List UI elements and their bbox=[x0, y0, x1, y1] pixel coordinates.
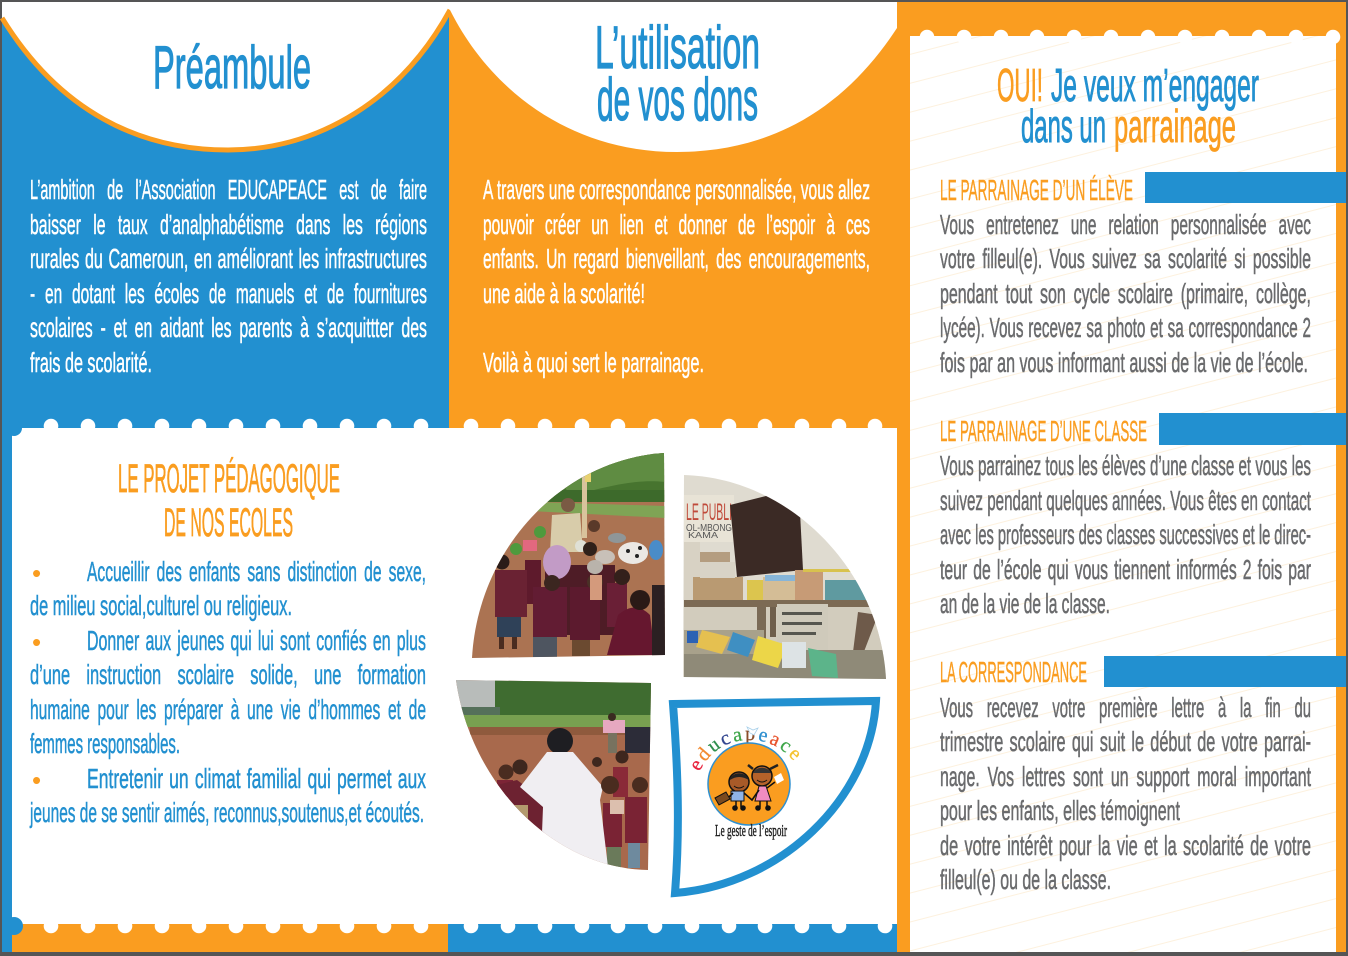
list: school project bullets: • bbox=[32, 627, 41, 657]
text block: preamble: rurales du Cameroun, en améliorant les infrastructures bbox=[30, 243, 427, 274]
panel: blue preamble background bbox=[2, 2, 449, 952]
text block: preamble bbox=[30, 174, 427, 378]
logo: educapeace bbox=[692, 726, 800, 840]
panel: pedagogical project sheet bbox=[2, 419, 897, 952]
text block: donations: enfants. Un regard bienveillant, des encouragements, bbox=[483, 243, 870, 274]
heading: OUI! Je veux m'engager dans un parrainage: parrainage bbox=[1114, 100, 1236, 152]
body text: an de la vie de la classe. bbox=[940, 588, 1110, 619]
photo: school books and supplies: OL-MBONG bbox=[686, 523, 732, 534]
list: school project bullets: • bbox=[32, 765, 41, 795]
arched name: educapeace bbox=[692, 730, 800, 770]
panel: donations white curved header bbox=[450, 2, 897, 152]
text: LE PROJET PÉDAGOGIQUE bbox=[118, 456, 340, 501]
section: parrainage d'une classe bbox=[940, 413, 1346, 619]
section: parrainage d'un élève: LE PARRAINAGE D’UN ÉLÈVE bbox=[940, 174, 1133, 207]
text block: preamble: L’ambition de l’Association EDUCAPEACE est de faire bbox=[30, 174, 427, 205]
section: la correspondance: LA CORRESPONDANCE bbox=[940, 657, 1087, 689]
photo: children with adult in white bbox=[456, 680, 651, 870]
heading bar bbox=[1145, 172, 1346, 203]
list: school project bullets: humaine pour les préparer à une vie d’hommes et de bbox=[30, 694, 426, 725]
list: school project bullets: Accueillir des enfants sans distinction de sexe, bbox=[87, 556, 426, 587]
photo: school books and supplies: KAMA bbox=[688, 531, 719, 540]
logo panel: blue framed quarter shape bbox=[668, 696, 880, 898]
list: school project bullets: • bbox=[32, 558, 41, 588]
photo: school books and supplies: LE PUBLI bbox=[686, 499, 732, 526]
heading bar bbox=[1104, 656, 1346, 687]
list: school project bullets: femmes responsables. bbox=[30, 728, 180, 759]
text block: donations: Voilà à quoi sert le parrainage. bbox=[483, 347, 704, 378]
heading: L'utilisation de vos dons: de vos dons bbox=[597, 66, 758, 133]
body text bbox=[940, 209, 1311, 378]
text block: preamble: frais de scolarité. bbox=[30, 347, 152, 378]
panel: orange donations background bbox=[449, 2, 1346, 952]
text block: preamble: baisser le taux d’analphabétisme dans les régions bbox=[30, 209, 427, 240]
body text bbox=[940, 692, 1311, 895]
icon: dove bbox=[747, 727, 758, 735]
tagline: Le geste de l’espoir bbox=[715, 821, 787, 840]
heading: L'utilisation de vos dons bbox=[595, 14, 760, 133]
list: school project bullets: Entretenir un climat familial qui permet aux bbox=[87, 763, 426, 794]
heading: OUI! Je veux m'engager dans un parrainage bbox=[997, 59, 1259, 152]
body text: pour les enfants, elles témoignent bbox=[940, 795, 1180, 826]
heading: Le projet pédagogique: DE NOS ECOLES bbox=[164, 501, 293, 545]
photo: school books and supplies bbox=[680, 470, 890, 682]
text block: preamble: - en dotant les écoles de manuels et de fournitures bbox=[30, 278, 427, 309]
section: la correspondance bbox=[940, 656, 1346, 895]
heading: Le projet pédagogique bbox=[118, 456, 340, 545]
list: school project bullets: jeunes de se sentir aimés, reconnus,soutenus,et écoutés. bbox=[29, 797, 424, 828]
body text bbox=[940, 450, 1311, 619]
text block: donations: une aide à la scolarité! bbox=[483, 278, 645, 309]
heading: Préambule: Préambule bbox=[153, 34, 311, 101]
panel: sponsorship sheet bbox=[910, 30, 1340, 952]
text block: donations: pouvoir créer un lien et donner de l’espoir à ces bbox=[483, 209, 870, 240]
list: school project bullets: Donner aux jeunes qui lui sont confiés en plus bbox=[87, 625, 426, 656]
heading: OUI! Je veux m'engager dans un parrainage: OUI! bbox=[997, 59, 1043, 111]
text block: donations: A travers une correspondance personnalisée, vous allez bbox=[483, 174, 870, 205]
list: school project bullets: d’une instruction scolaire solide, une formation bbox=[30, 659, 426, 690]
text block: preamble: scolaires - et en aidant les parents à s’acquittter des bbox=[30, 312, 427, 343]
section: parrainage d'un élève bbox=[940, 172, 1346, 378]
heading bar bbox=[1159, 413, 1346, 445]
list: school project bullets bbox=[29, 556, 426, 828]
text block: donations bbox=[483, 174, 870, 378]
heading: L'utilisation de vos dons: L’utilisation bbox=[595, 14, 760, 81]
body text: filleul(e) ou de la classe. bbox=[940, 864, 1111, 895]
list: school project bullets: de milieu social,culturel ou religieux. bbox=[30, 590, 292, 621]
panel: preamble white curved header bbox=[2, 2, 450, 150]
heading: OUI! Je veux m'engager dans un parrainage: dans un bbox=[1021, 100, 1106, 152]
photo: children holding toys bbox=[465, 450, 670, 660]
orange circle with two children bbox=[708, 743, 790, 825]
